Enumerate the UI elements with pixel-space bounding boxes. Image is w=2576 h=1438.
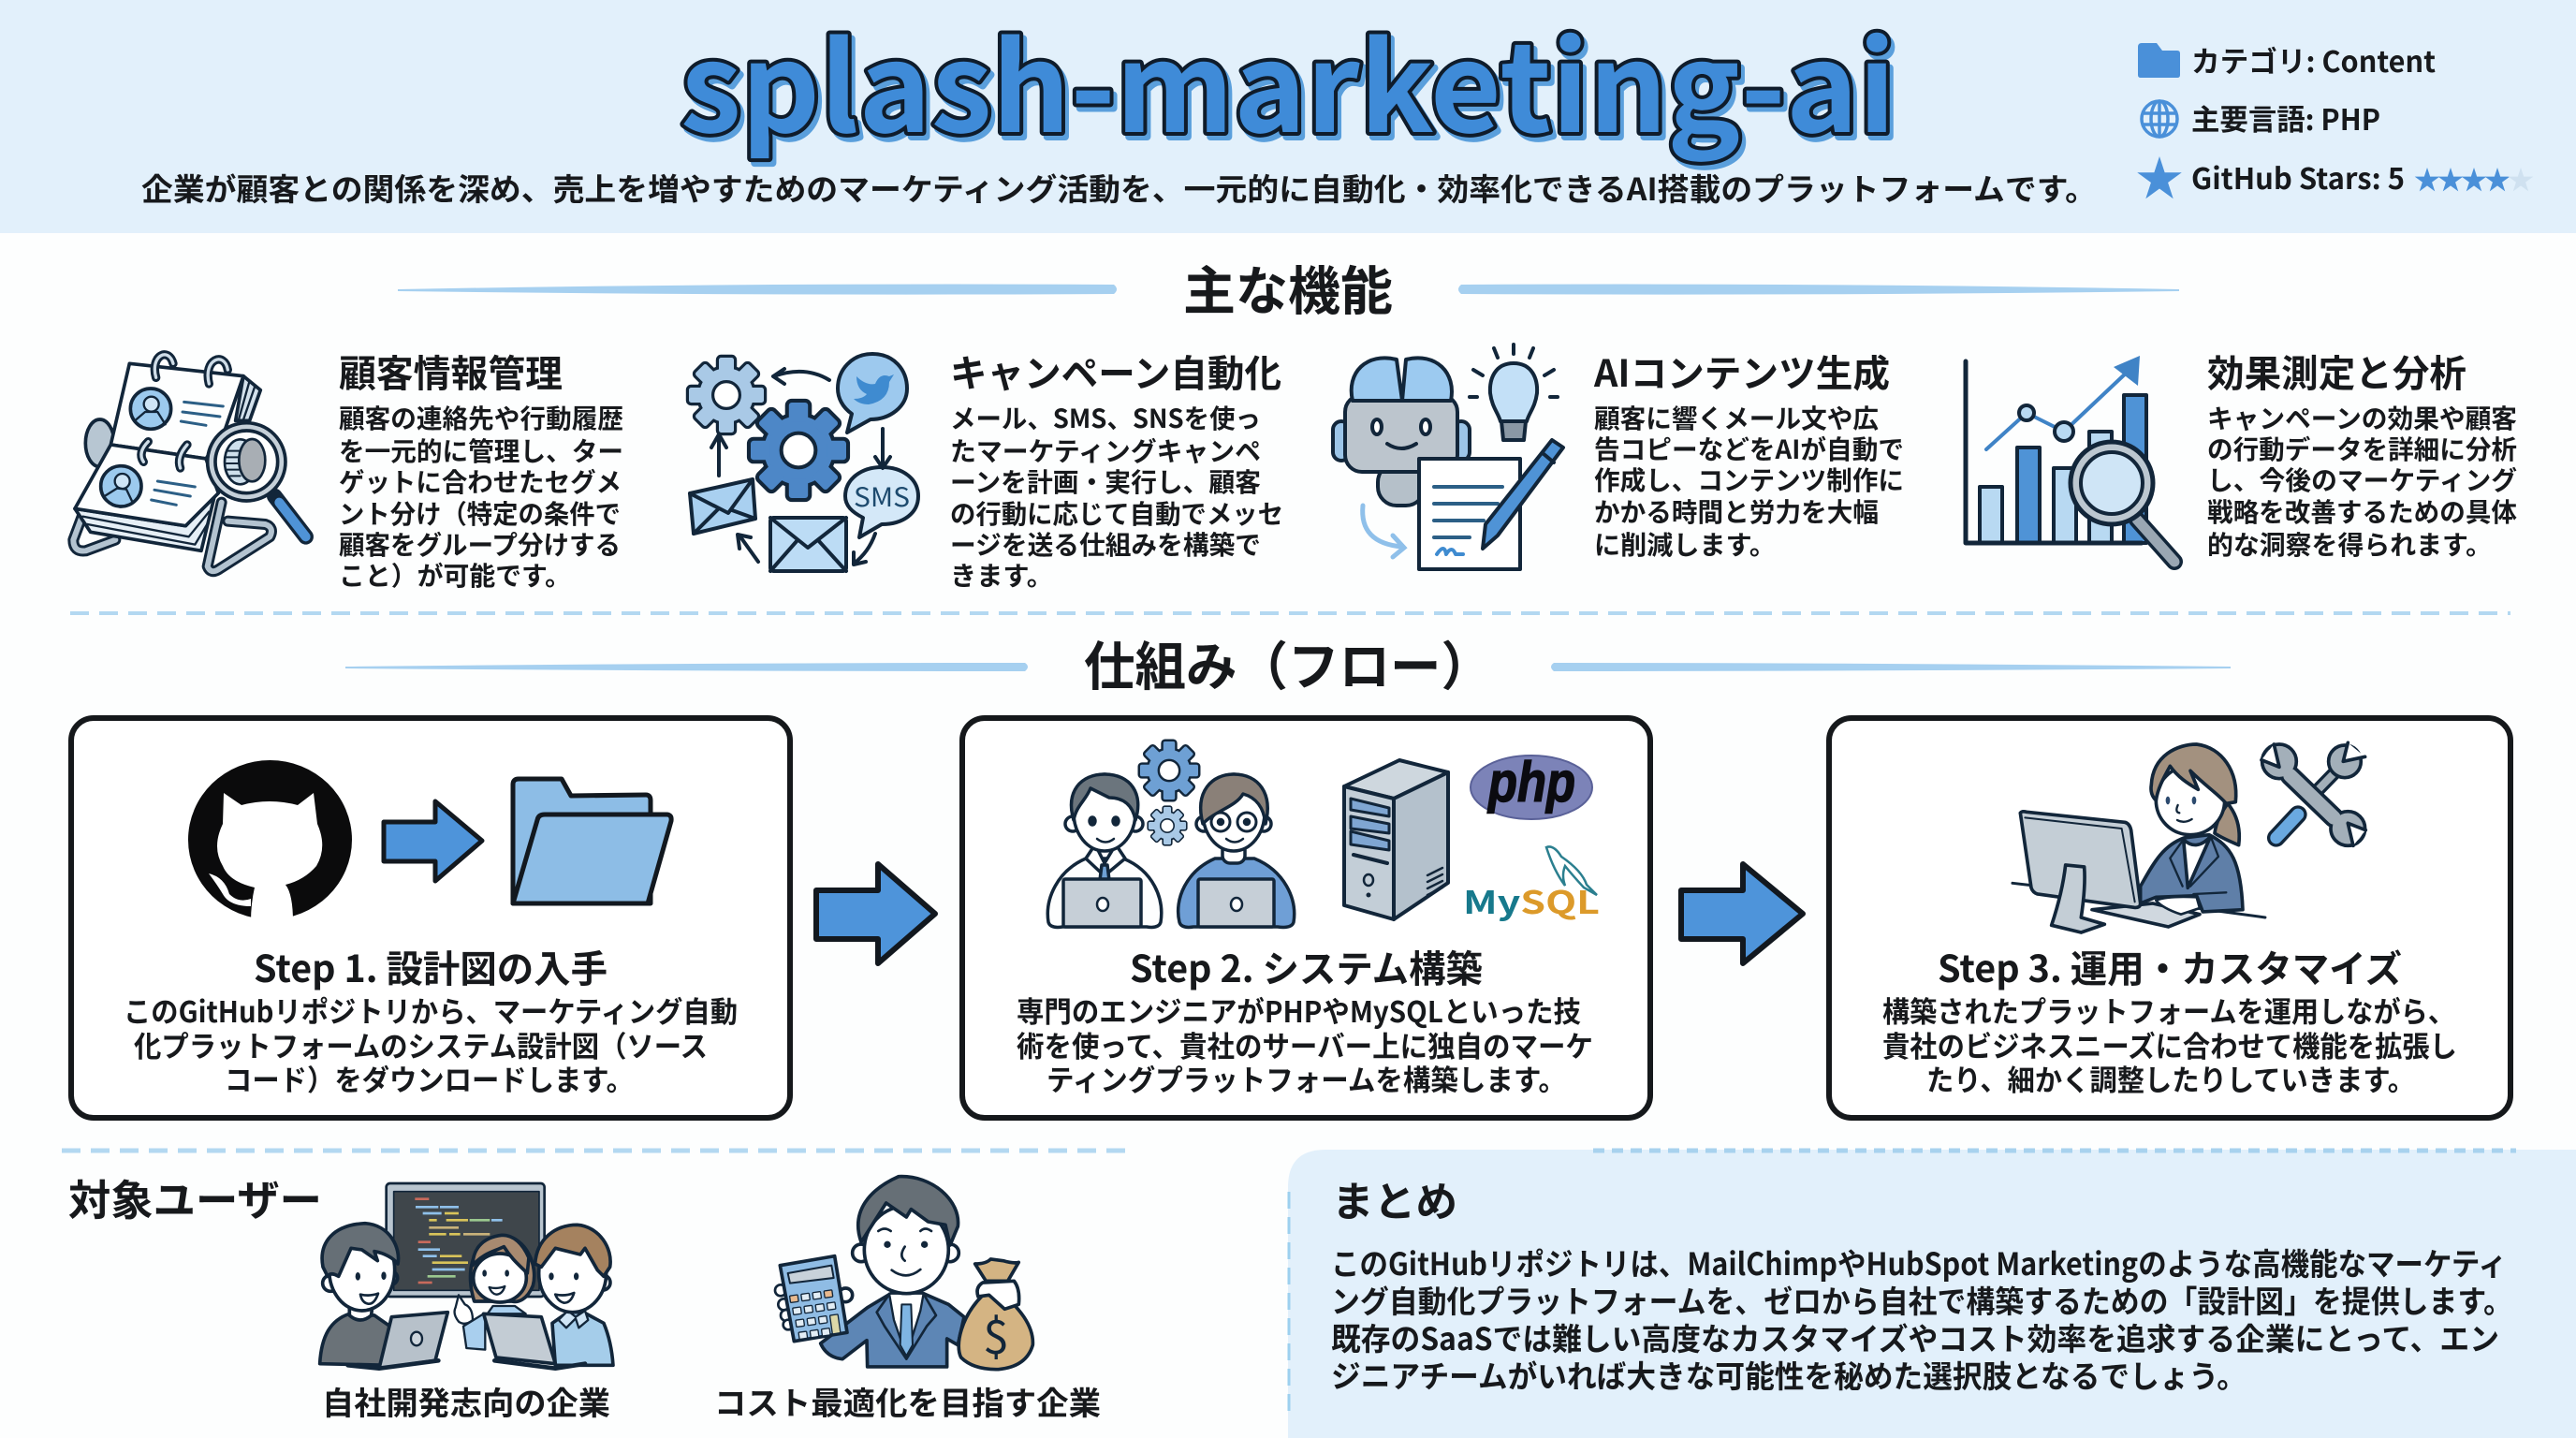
icon: small gear <box>689 358 764 433</box>
icon: document <box>1419 459 1520 569</box>
header band <box>0 0 2576 233</box>
feature 1 text <box>339 344 623 594</box>
panel: summary: 既存のSaaSでは難しい高度なカスタマイズやコスト効率を追求する企業にとって、エン <box>1331 1314 2499 1359</box>
small arrow <box>384 801 482 881</box>
step 3 panel: 貴社のビジネスニーズに合わせて機能を拡張し <box>1882 1023 2457 1065</box>
step 1 panel: このGitHubリポジトリから、マーケティング自動 <box>124 989 738 1031</box>
meta: GitHub stars <box>2137 155 2533 198</box>
feature 2 text: ージを送る仕組みを構築で <box>950 525 1261 563</box>
feature 2 text: キャンペーン自動化 <box>950 344 1281 398</box>
panel: summary: まとめ <box>1332 1168 1457 1228</box>
logo: PHP: php <box>1486 751 1575 814</box>
feature 1 text: 顧客をグループ分けする <box>339 525 621 563</box>
icon: envelope left <box>690 479 755 534</box>
icon: bar chart with magnifier <box>1966 356 2174 562</box>
step 3 panel: たり、細かく調整したりしていきます。 <box>1926 1057 2415 1099</box>
feature 4 text <box>2207 344 2517 563</box>
feature: AI content <box>1333 345 1563 569</box>
feature 4 text: 効果測定と分析 <box>2207 344 2466 398</box>
step 1 panel: コード）をダウンロードします。 <box>225 1057 634 1099</box>
feature: analytics <box>1966 356 2174 562</box>
flow arrow 1 <box>816 864 935 963</box>
step 1 panel: 化プラットフォームのシステム設計図（ソース <box>134 1023 708 1065</box>
feature 4 text: キャンペーンの効果や顧客 <box>2207 399 2517 436</box>
icon: light bulb <box>1470 345 1558 440</box>
heading: flow: 仕組み（フロー） <box>1084 625 1492 701</box>
heading: target users: 対象ユーザー <box>68 1167 322 1227</box>
rating stars <box>2415 168 2533 191</box>
engineer right <box>1178 774 1295 927</box>
icon: folder <box>2138 43 2180 78</box>
panel: summary: このGitHubリポジトリは、MailChimpやHubSpot Marketingのような高機能なマーケティ <box>1331 1240 2507 1284</box>
step 3 panel <box>1829 718 2510 1118</box>
feature 3 text: 作成し、コンテンツ制作に <box>1594 461 1904 498</box>
illustration: dev team with code screen <box>320 1183 613 1369</box>
step 1 panel <box>71 718 790 1118</box>
feature 1 text: を一元的に管理し、ター <box>339 432 623 469</box>
step 3 panel: Step 3. 運用・カスタマイズ <box>1938 939 2402 993</box>
icon: SMS bubble <box>845 467 918 537</box>
icon: globe <box>2142 101 2177 137</box>
meta: language: 主要言語: PHP <box>2191 96 2380 139</box>
icon: rolodex with magnifier <box>73 355 306 571</box>
icon: server <box>1344 760 1448 919</box>
subtitle: 企業が顧客との関係を深め、売上を増やすためのマーケティング活動を、一元的に自動化・効率化できるAI搭載のプラットフォームです。 <box>141 165 2097 210</box>
feature 3 text: 告コピーなどをAIが自動で <box>1594 430 1904 467</box>
heading: main features <box>398 250 2179 326</box>
icon: folder <box>513 779 671 903</box>
panel: summary: ング自動化プラットフォームを、ゼロから自社で構築するための「設計図」を提供します。 <box>1331 1277 2512 1322</box>
illustration: operator at computer <box>2012 744 2265 932</box>
feature 3 text: かかる時間と労力を大幅 <box>1594 492 1879 530</box>
feature 3 text <box>1593 344 1904 563</box>
feature: customer data <box>73 355 306 571</box>
icon: pen <box>1483 440 1563 549</box>
step 3 panel: 構築されたプラットフォームを運用しながら、 <box>1882 989 2455 1031</box>
feature 1 text: 顧客の連絡先や行動履歴 <box>339 399 623 436</box>
heading: main features: 主な機能 <box>1183 250 1393 326</box>
feature 1 text: こと）が可能です。 <box>339 556 571 594</box>
icon: big gear <box>751 403 846 498</box>
feature: campaign automation <box>689 354 918 571</box>
feature 2 text: たマーケティングキャンペ <box>950 432 1261 469</box>
feature 2 text: きます。 <box>950 556 1053 594</box>
illustration: businessman with calculator and money bag <box>775 1177 1032 1370</box>
feature 3 text: AIコンテンツ生成 <box>1593 344 1890 398</box>
feature 2 text: の行動に応じて自動でメッセ <box>950 494 1283 532</box>
panel: summary: ジニアチームがいれば大きな可能性を秘めた選択肢となるでしょう。 <box>1331 1352 2247 1397</box>
step 2 panel: 専門のエンジニアがPHPやMySQLといった技 <box>1017 989 1581 1031</box>
feature 4 text: 戦略を改善するための具体 <box>2207 492 2517 530</box>
engineer left <box>1047 774 1162 927</box>
feature 1 text: 顧客情報管理 <box>339 344 563 398</box>
icon: flow arrows <box>711 369 890 565</box>
flow arrow 2 <box>1681 864 1803 963</box>
icon: star <box>2137 156 2182 198</box>
feature 3 text: に削減します。 <box>1594 525 1776 563</box>
feature 1 text: ゲットに合わせたセグメ <box>339 462 622 500</box>
icon: GitHub <box>188 760 352 922</box>
feature 2 text <box>950 344 1283 594</box>
icon: tools <box>2261 742 2365 845</box>
icon: twitter bubble <box>838 354 907 433</box>
icon: SMS bubble: SMS <box>854 477 910 515</box>
icon: gears <box>1140 741 1198 844</box>
feature 4 text: の行動データを詳細に分析 <box>2207 430 2517 467</box>
user: in-house dev company: 自社開発志向の企業 <box>322 1378 610 1424</box>
step 1 panel: Step 1. 設計図の入手 <box>254 939 607 993</box>
logo: MySQL <box>1463 846 1600 923</box>
illustration: businessman with calculator and money bag: $ <box>983 1300 1009 1368</box>
panel: summary <box>1288 1150 2576 1438</box>
logo: MySQL: My SQL <box>1463 877 1600 923</box>
step 2 panel <box>962 718 1650 1118</box>
step 2 panel: Step 2. システム構築 <box>1130 939 1483 993</box>
step 2 panel: 術を使って、貴社のサーバー上に独自のマーケ <box>1017 1023 1593 1065</box>
feature 2 text: ーンを計画・実行し、顧客 <box>950 462 1261 500</box>
icon: robot <box>1333 358 1470 506</box>
feature 2 text: メール、SMS、SNSを使っ <box>950 399 1261 436</box>
icon: envelope bottom <box>770 518 846 571</box>
step 2 panel: ティングプラットフォームを構築します。 <box>1046 1057 1566 1099</box>
user: in-house dev company <box>320 1183 613 1424</box>
feature 3 text: 顧客に響くメール文や広 <box>1594 399 1879 436</box>
feature 4 text: 的な洞察を得られます。 <box>2207 525 2492 563</box>
heading: flow <box>345 625 2231 701</box>
user: cost optimization company: コスト最適化を目指す企業 <box>714 1378 1101 1424</box>
feature 1 text: ント分け（特定の条件で <box>339 494 621 532</box>
feature 4 text: し、今後のマーケティング <box>2207 461 2517 498</box>
user: cost optimization company <box>714 1177 1101 1424</box>
meta: GitHub stars: GitHub Stars: 5 <box>2191 155 2405 198</box>
icon: curved arrow <box>1363 506 1404 557</box>
meta: category: カテゴリ: Content <box>2191 38 2436 81</box>
